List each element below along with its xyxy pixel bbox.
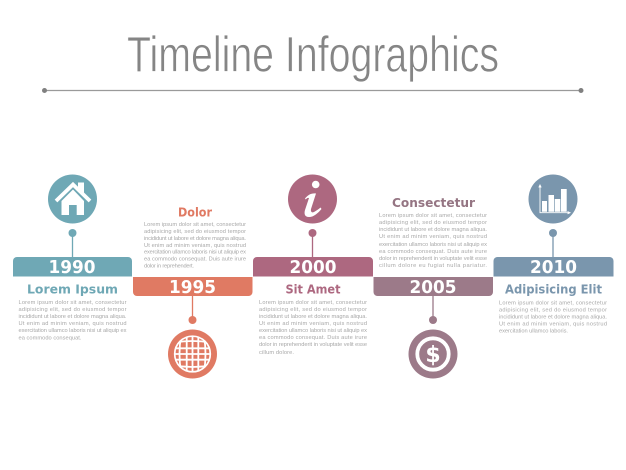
body text: exercitation ullamco laboris.: [499, 328, 568, 334]
body text: ea commodo consequat. Duis aute irure: [259, 335, 367, 341]
icon: information: [288, 174, 337, 224]
body text: Ut enim ad minim veniam, quis nostrud: [259, 321, 367, 327]
body text: adipisicing elit, sed do eiusmod tempor: [259, 307, 367, 313]
icon: house: [48, 174, 97, 224]
body text: Ut enim ad minim veniam, quis nostrud: [144, 243, 246, 249]
body text: dolor in reprehendert.: [144, 264, 194, 270]
icon: dollar coin: [408, 330, 458, 378]
year bar: [13, 257, 132, 276]
body text: [379, 213, 487, 269]
milestone: 1990: [13, 174, 132, 342]
heading: Lorem Ipsum: [27, 281, 118, 296]
body text: [18, 300, 127, 342]
body text: adipisicing elit, sed do eiusmod tempor: [144, 229, 246, 235]
body text: [499, 300, 607, 334]
body text: incididunt ut labore et dolore magna aliqua.: [18, 314, 127, 320]
body text: exercitation ullamco laboris nisi ut aliquip ex: [259, 328, 367, 334]
milestone: 2005: [374, 195, 493, 378]
connector: [549, 229, 557, 258]
body text: incididunt ut labore et dolore magna aliqua.: [259, 314, 367, 320]
title: Timeline Infographics: [127, 26, 499, 82]
body text: dolor in reprehenderit in voluptate velit esse: [259, 342, 367, 348]
year bar: [374, 277, 493, 296]
year: 1995: [169, 278, 216, 298]
milestone: 1995: [133, 204, 252, 378]
connector: [429, 296, 437, 324]
heading: Sit Amet: [286, 281, 341, 296]
icon: globe: [168, 330, 217, 378]
body text: exercitation ullamco laboris nisi ut aliquip ex: [144, 250, 246, 256]
body text: Lorem ipsum dolor sit amet, consectetur: [499, 300, 607, 306]
body text: Ut enim ad minim veniam, quis nostrud: [379, 234, 487, 240]
body text: adipisicing elit, sed do eiusmod tempor: [379, 220, 487, 226]
body text: adipisicing elit, sed do eiusmod tempor: [499, 308, 607, 314]
title divider: [42, 88, 584, 93]
milestone: 2010: [494, 174, 614, 334]
connector: [308, 229, 316, 258]
year: 2010: [530, 258, 577, 278]
body text: Lorem ipsum dolor sit amet, consectetur: [379, 213, 487, 219]
year: 1990: [48, 258, 96, 278]
icon: dollar coin: $: [425, 343, 441, 368]
body text: Lorem ipsum dolor sit amet, consectetur: [144, 222, 246, 228]
body text: Ut enim ad minim veniam, quis nostrud: [499, 322, 607, 328]
year bar: [133, 277, 252, 296]
body text: adipisicing elit, sed do eiusmod tempor: [18, 307, 127, 313]
body text: ea commodo consequat. Duis aute irure: [144, 256, 246, 262]
body text: cillum dolore.: [259, 350, 294, 356]
body text: ea commodo consequat. Duis aute irure: [379, 249, 487, 255]
year: 2000: [290, 258, 336, 278]
body text: dolor in reprehenderit in voluptate velit esse: [379, 256, 487, 262]
year bar: [253, 257, 373, 276]
body text: incididunt ut labore et dolore magna aliqua.: [144, 236, 246, 242]
year: 2005: [410, 278, 456, 298]
body text: [259, 300, 367, 356]
body text: Lorem ipsum dolor sit amet, consectetur: [259, 300, 367, 306]
body text: incididunt ut labore et dolore magna aliqua.: [379, 227, 487, 233]
heading: Adipisicing Elit: [505, 282, 602, 296]
body text: Lorem ipsum dolor sit amet, consectetur: [18, 300, 127, 306]
heading: Dolor: [178, 204, 213, 220]
body text: [144, 222, 246, 270]
body text: cillum dolore eu fugiat nulla pariatur.: [379, 263, 487, 269]
body text: Ut enim ad minim veniam, quis nostrud: [18, 321, 126, 327]
body text: ea commodo consequat.: [18, 336, 82, 342]
connector: [68, 229, 76, 258]
icon: bar chart: [528, 174, 578, 224]
body text: incididunt ut labore et dolore magna aliqua.: [499, 314, 607, 320]
body text: exercitation ullamco laboris nisi ut aliquip ex: [379, 242, 487, 248]
body text: exercitation ullamco laboris nisi ut aliquip ex: [18, 328, 127, 334]
connector: [188, 296, 196, 324]
year bar: [494, 257, 614, 276]
milestone: 2000: [253, 174, 373, 356]
heading: Consectetur: [392, 195, 476, 210]
